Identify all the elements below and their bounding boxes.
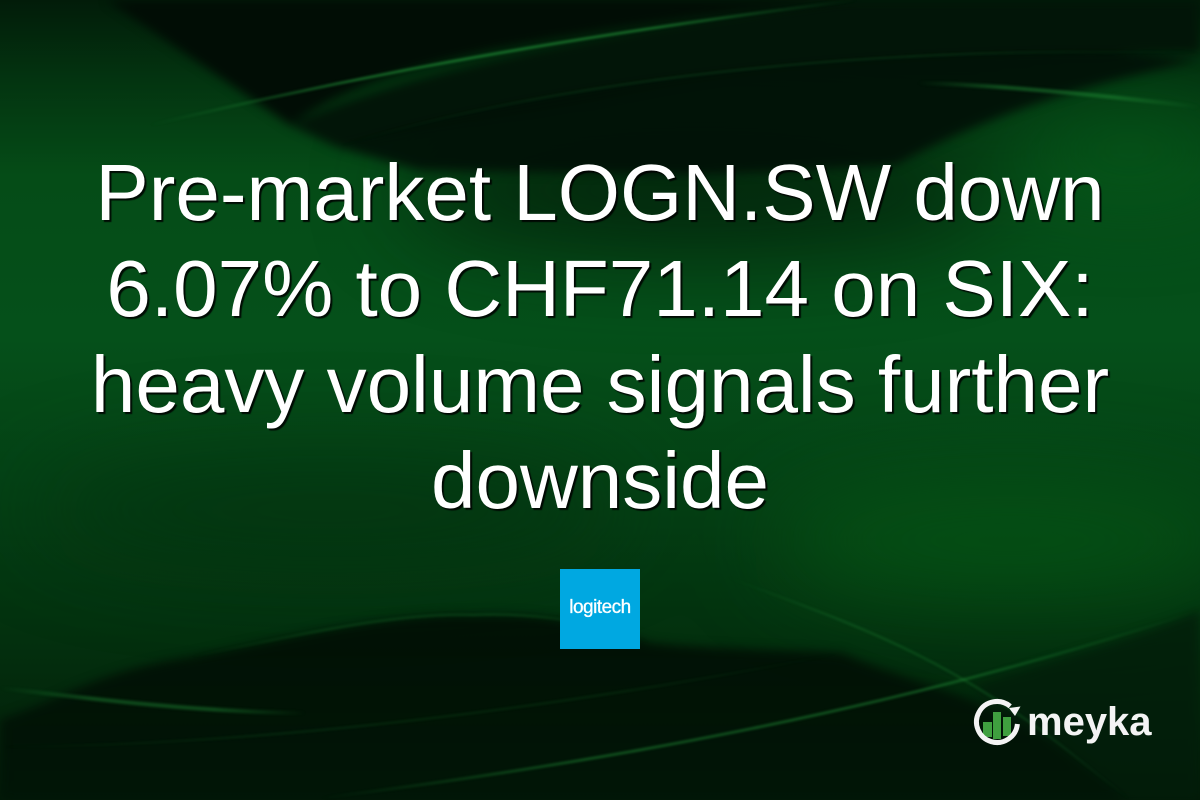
soft tonal patches bbox=[30, 105, 1200, 600]
icon: logitech logo: logitech bbox=[569, 597, 631, 618]
title: Pre-market LOGN.SW down 6.07% to CHF71.14 on SIX: heavy volume signals further downside bbox=[91, 148, 1109, 525]
icon: refresh ring bbox=[976, 701, 1020, 742]
wordmark: meyka bbox=[1027, 700, 1152, 744]
icon: logitech logo bbox=[560, 569, 640, 649]
icon: meyka logo bbox=[974, 698, 1152, 746]
icon: chart bars bbox=[983, 712, 1011, 739]
